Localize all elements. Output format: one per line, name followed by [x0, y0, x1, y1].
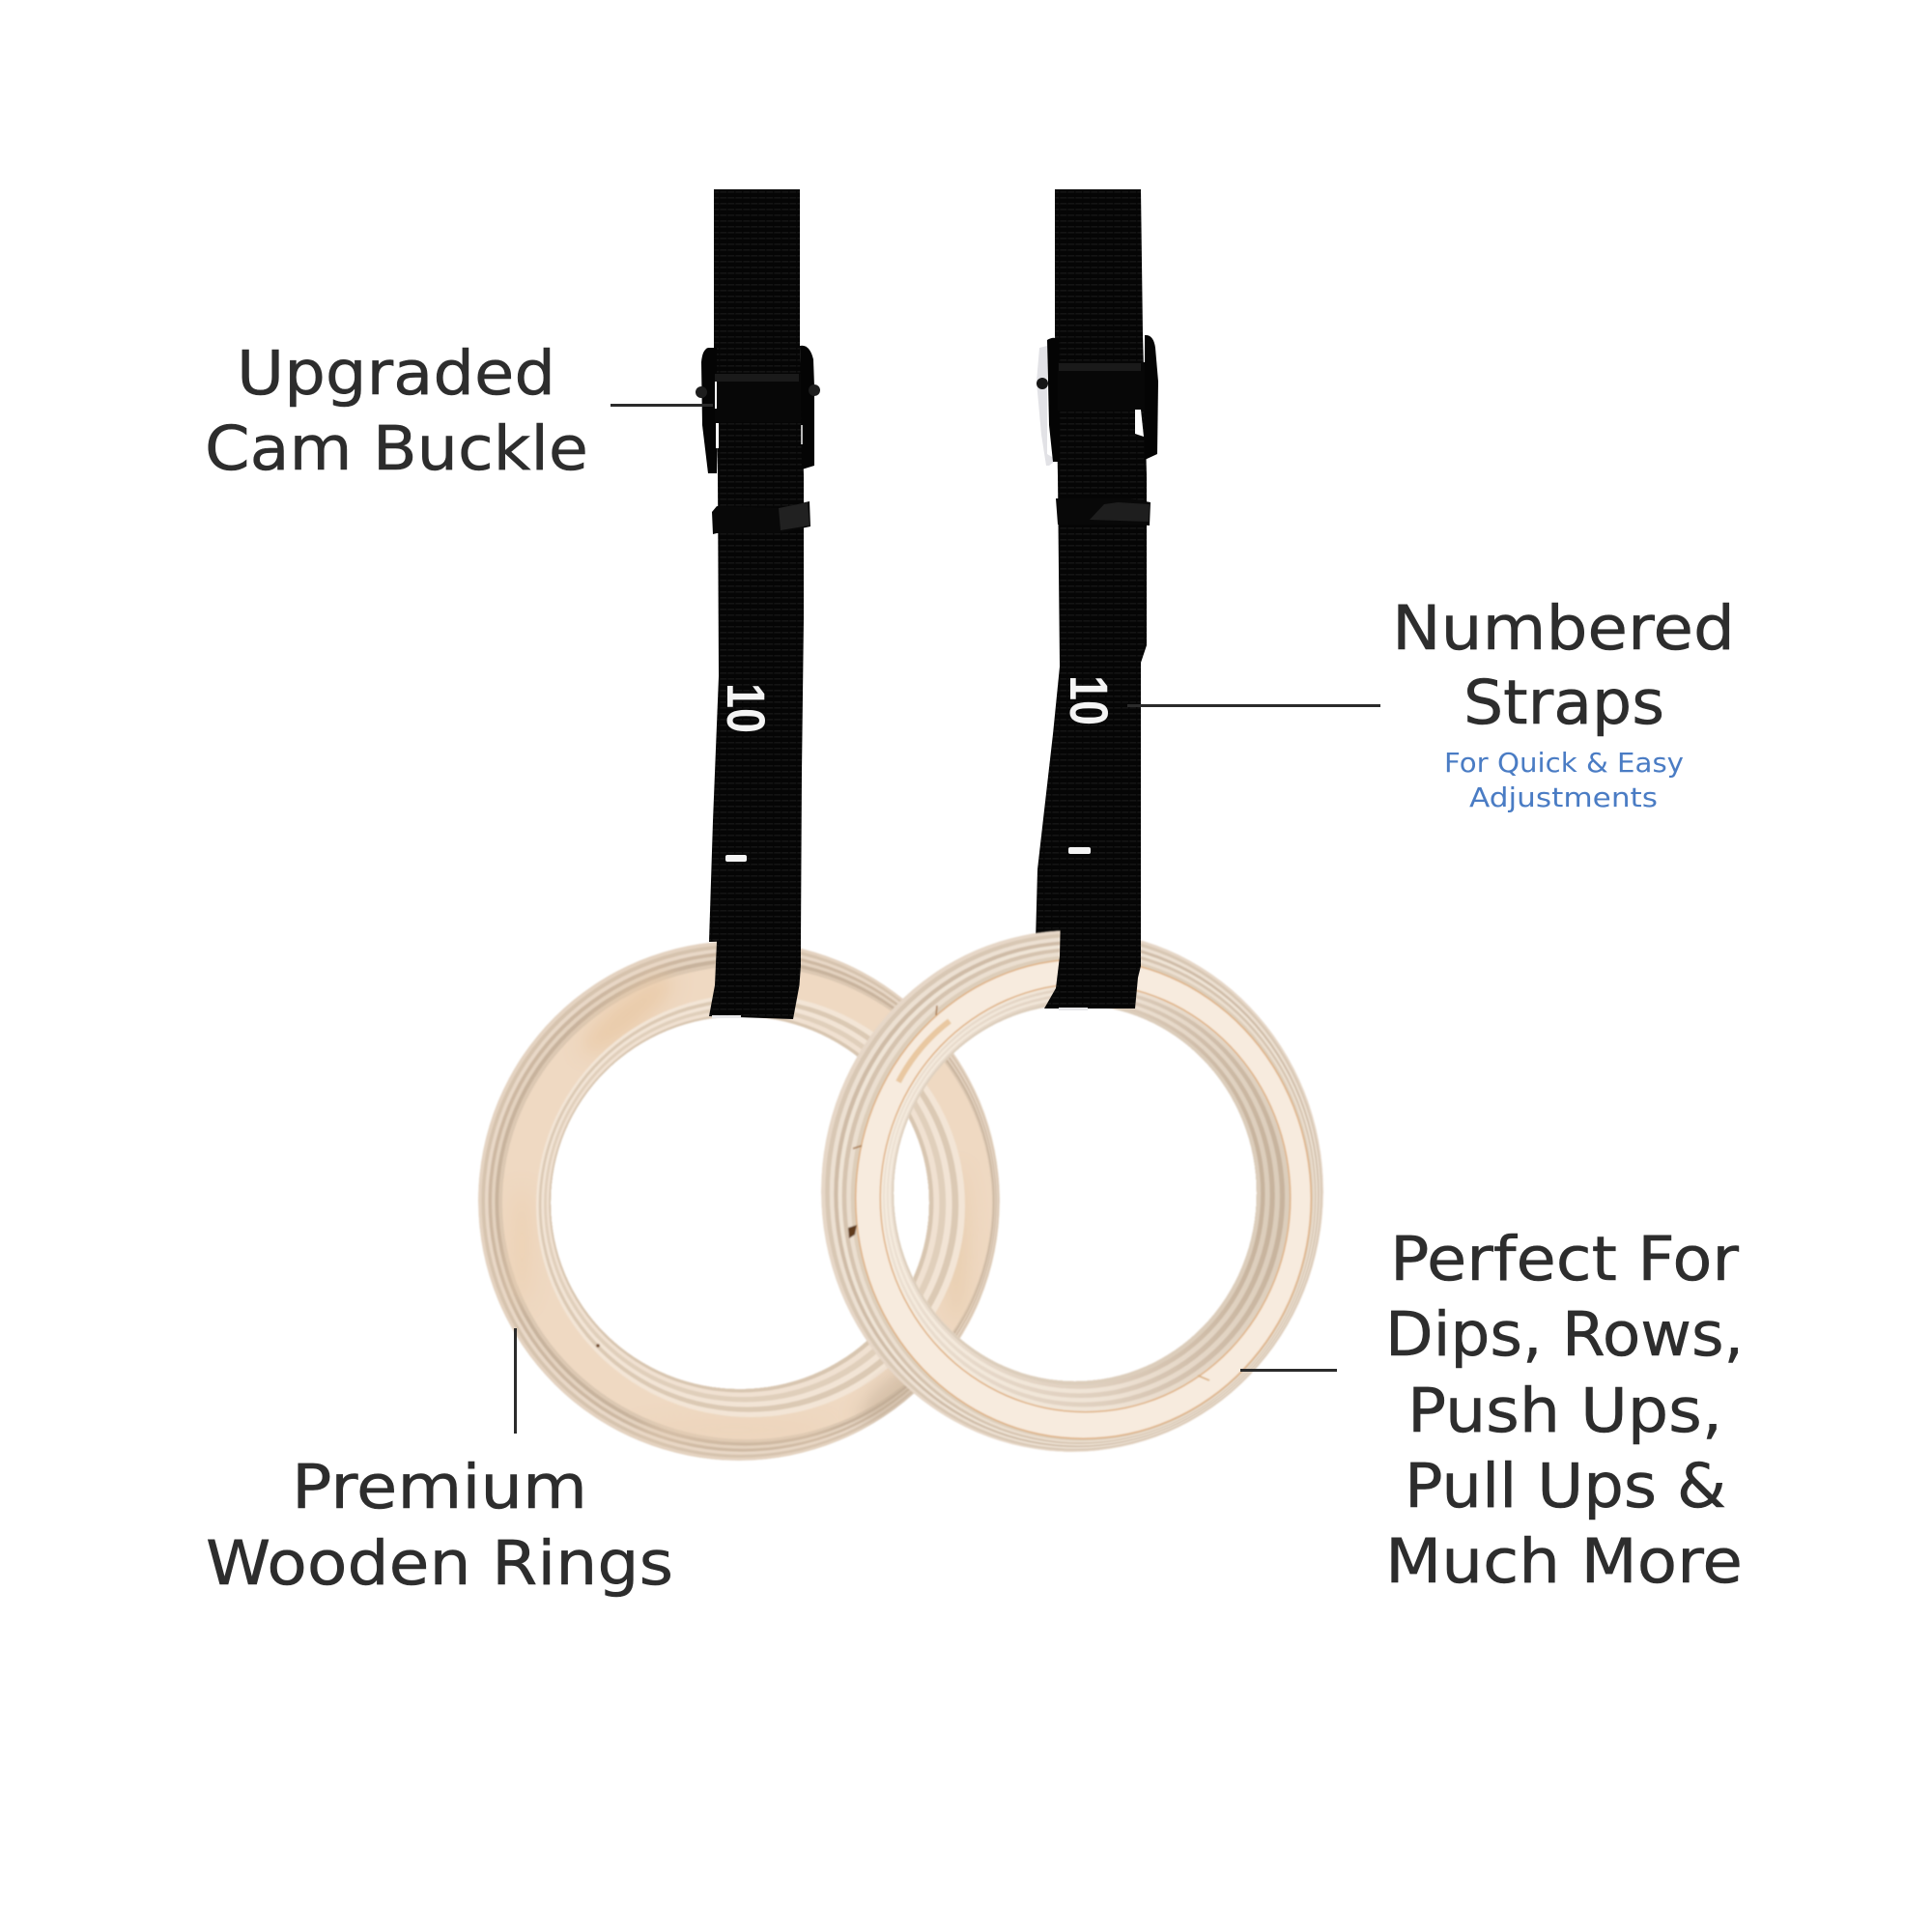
leader line: [611, 404, 713, 407]
right numbered marks: [1059, 675, 1120, 854]
outer plywood layers: [478, 941, 1000, 1461]
cam lever: [715, 374, 801, 422]
inner plywood layers: [536, 994, 965, 1417]
right strap: upper webbing: [1036, 189, 1147, 942]
callout: Perfect For: Push Ups,: [1407, 1376, 1722, 1446]
silver side plate: [1037, 346, 1057, 466]
callout: Perfect For: Dips, Rows,: [1385, 1299, 1744, 1370]
strap number 10: 10: [716, 683, 777, 733]
left strap: upper webbing: [709, 189, 804, 942]
left cam buckle: [696, 346, 820, 473]
face veneer: [856, 960, 1310, 1437]
sub-label: For Quick & Easy: [1444, 748, 1684, 779]
callout: Numbered Straps: Straps: [1463, 668, 1664, 738]
right strap keeper loop: [1056, 498, 1151, 526]
label: Upgraded: [237, 338, 555, 409]
label: Perfect For: [1390, 1224, 1739, 1294]
buckle side frames: [701, 348, 717, 473]
left strap: loop over left ring: [709, 869, 801, 1019]
right strap: loop over right ring: [1044, 869, 1141, 1010]
callout: Numbered Straps: [1127, 593, 1735, 813]
cam lever: [1058, 362, 1145, 411]
inner veneer line: [879, 983, 1291, 1412]
right cam buckle: [1037, 335, 1158, 466]
left strap keeper loop: [712, 501, 810, 534]
outer veneer line: [855, 958, 1312, 1439]
small knot: [596, 1344, 600, 1348]
callout: Premium Wooden Rings: [206, 1328, 673, 1599]
strap tick: [1068, 847, 1091, 854]
shaded lower right near the crossing: [860, 1372, 914, 1425]
white gaps in the buckle: [715, 382, 717, 409]
callout: Upgraded Cam Buckle: [205, 338, 713, 484]
right wooden ring: [821, 930, 1323, 1452]
label: Premium: [292, 1452, 587, 1522]
strap tick: [725, 855, 747, 862]
callout: Perfect For: Pull Ups &: [1405, 1451, 1726, 1521]
leader line: [1240, 1369, 1337, 1372]
white gap in the buckle: [1135, 410, 1144, 437]
callout: Numbered Straps: Adjustments: [1469, 782, 1658, 813]
left wooden ring: [478, 941, 1000, 1461]
leader line: [514, 1328, 517, 1434]
buckle side frames: [1047, 338, 1060, 462]
outer plywood layers: [821, 930, 1323, 1452]
callout: Upgraded Cam Buckle: Cam Buckle: [205, 413, 588, 484]
callout: Perfect For: [1240, 1224, 1744, 1597]
orange grain streak: [898, 1021, 950, 1082]
callout: Perfect For: Much More: [1385, 1526, 1743, 1597]
face veneer: [502, 966, 992, 1439]
callout: Premium Wooden Rings: Wooden Rings: [206, 1528, 673, 1599]
left numbered marks: [716, 683, 777, 862]
strap number 10: 10: [1059, 675, 1120, 725]
leader line: [1127, 704, 1380, 707]
buckle bolt: [1037, 378, 1048, 389]
wood knot: [848, 1225, 857, 1238]
inner plywood layers: [881, 984, 1290, 1411]
buckle bolts: [696, 386, 707, 398]
label: Numbered: [1392, 593, 1735, 664]
warm grain patches: [512, 965, 968, 1437]
